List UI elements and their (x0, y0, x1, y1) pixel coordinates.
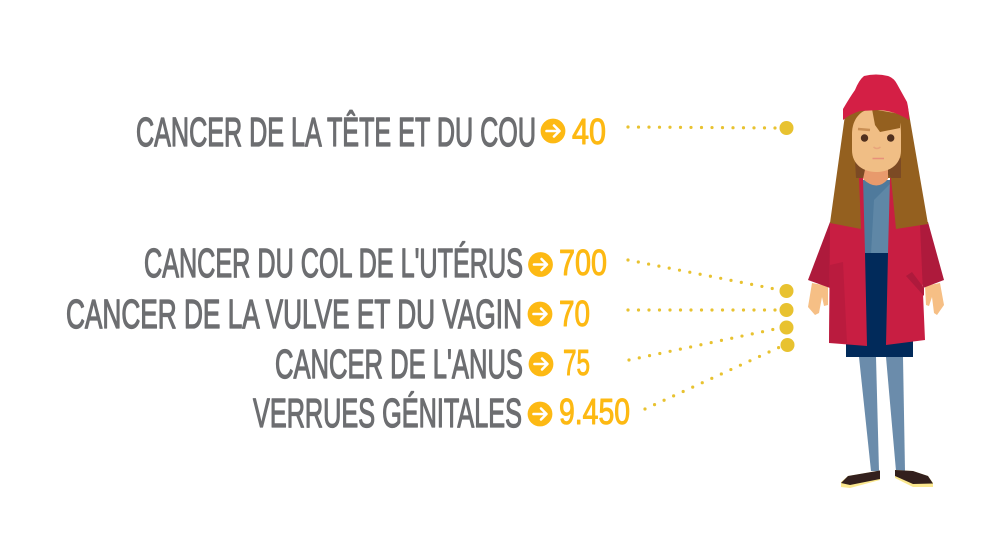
dotted connectors (628, 127, 780, 409)
icon: arrow (528, 252, 553, 277)
label: cervical cancer: CANCER DU COL DE L'UTÉRUS (144, 240, 523, 286)
label: anal cancer: CANCER DE L'ANUS (275, 341, 523, 387)
icon: arrow (528, 302, 552, 326)
row: head and neck cancer (136, 109, 606, 155)
eyes (861, 134, 894, 142)
skirt (846, 340, 913, 357)
number: 9.450: 9.450 (559, 391, 630, 432)
shoes (841, 470, 933, 488)
label: genital warts: VERRUES GÉNITALES (253, 390, 522, 436)
label: head and neck cancer: CANCER DE LA TÊTE ET DU COU (136, 109, 536, 155)
shadow hair under chin (855, 158, 901, 178)
hair (830, 108, 928, 229)
number: 700: 700 (559, 242, 607, 283)
legs (859, 357, 905, 471)
row: cervical cancer (144, 240, 607, 286)
hat (843, 74, 909, 120)
row: genital warts (253, 390, 630, 436)
icon: arrow (528, 402, 552, 426)
icon: arrow (541, 119, 565, 143)
mouth (872, 158, 884, 160)
number: 40: 40 (572, 111, 606, 152)
row: anal cancer (275, 341, 590, 387)
fringe (872, 109, 900, 132)
eyebrow (858, 129, 870, 130)
shirt and inner dress (863, 180, 890, 347)
label: vulvar and vaginal cancer: CANCER DE LA VULVE ET DU VAGIN (66, 291, 522, 337)
row: vulvar and vaginal cancer (66, 291, 590, 337)
neck (863, 165, 888, 186)
number: 70: 70 (559, 293, 590, 334)
illustration: girl in red coat (808, 74, 944, 488)
icon: arrow (529, 352, 553, 376)
face (852, 109, 901, 172)
nose (874, 147, 880, 148)
sleeves (808, 222, 944, 288)
coat (829, 178, 925, 346)
hands (808, 283, 944, 315)
body marker dots (780, 121, 794, 352)
number: 75: 75 (563, 342, 590, 383)
